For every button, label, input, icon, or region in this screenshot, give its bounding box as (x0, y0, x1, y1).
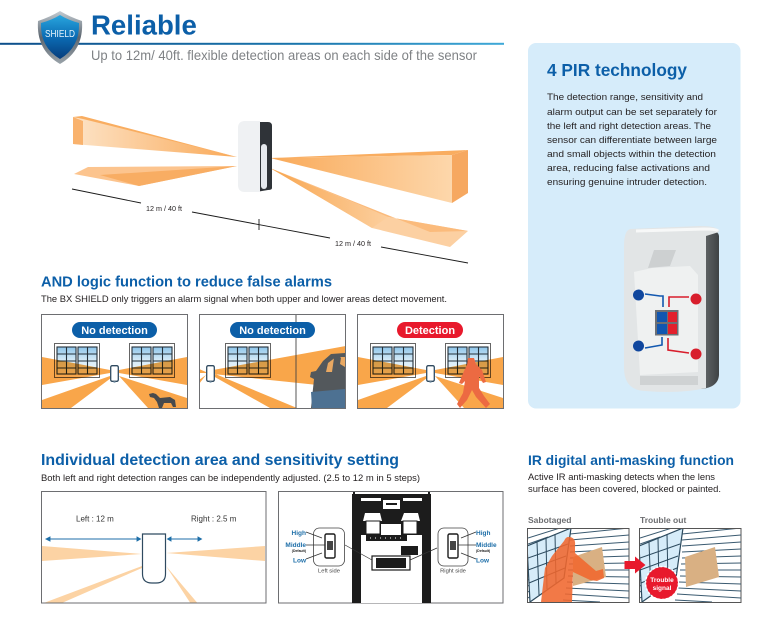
left upper beam (73, 116, 237, 157)
person silhouette (541, 537, 604, 602)
labels: left side: Middle (285, 542, 306, 549)
panel: sabotaged scene (527, 528, 629, 602)
text: AND logic description: The BX SHIELD only triggers an alarm signal when both upper and lower areas detect movement. (41, 294, 447, 304)
icon: car (310, 353, 345, 408)
right lower beam (270, 168, 468, 247)
badge: detection (397, 322, 463, 338)
distance label right: 12 m / 40 ft (335, 239, 371, 248)
title: Reliable (91, 10, 197, 40)
labels: right side: High (476, 530, 490, 537)
left lower beam (74, 166, 237, 186)
badge: no detection: No detection (239, 325, 306, 337)
connector (372, 556, 410, 570)
PIR left, blue (633, 290, 663, 352)
text: PIR description: and small objects within the detection (547, 149, 716, 159)
icon: shield badge (38, 11, 82, 64)
panel: detection with person (358, 314, 504, 408)
label: left range: Left : 12 m (76, 514, 114, 524)
text: IR description: surface has been covered, blocked or painted. (528, 484, 721, 494)
subtitle: Up to 12m/ 40ft. flexible detection areas on each side of the sensor (91, 47, 477, 63)
text: PIR description: area, reducing false activations and (547, 163, 710, 173)
circuit board (345, 492, 437, 603)
text: PIR description: alarm output can be set separately for (547, 107, 717, 117)
text: PIR description: the left and right detection areas. The (547, 121, 711, 131)
panel: no detection with car (199, 314, 346, 408)
badge: detection: Detection (405, 325, 455, 337)
right upper beam (270, 150, 468, 203)
label: trouble out: Trouble out (640, 515, 686, 525)
icon: trouble signal burst (646, 566, 678, 600)
detection area diagram (72, 116, 468, 263)
beams (42, 546, 265, 602)
box (685, 547, 719, 587)
icon: sensor (111, 366, 118, 383)
labels: right side: Right side (440, 568, 466, 574)
panel: trouble out scene (639, 528, 741, 602)
text: IR description (528, 472, 721, 494)
labels: right side: Middle (476, 542, 497, 549)
icon: sensor (207, 366, 214, 383)
icon: trouble signal burst: signal (653, 585, 672, 592)
icon: dog (149, 393, 176, 408)
labels: right side (440, 530, 497, 574)
text: individual detection description: Both left and right detection ranges can be independently adjusted. (2.5 to 12 m in 5 steps) (41, 473, 420, 483)
text: PIR description: The detection range, sensitivity and (547, 92, 703, 102)
distance label left: 12 m / 40 ft (146, 204, 182, 213)
labels: left side (285, 530, 340, 574)
panel: 4 PIR technology (528, 43, 740, 408)
heading: 4 PIR technology: 4 PIR technology (547, 60, 687, 80)
header rule (0, 43, 504, 45)
heading: IR anti-masking: IR digital anti-masking function (528, 452, 734, 468)
labels: left side: Left side (318, 568, 340, 574)
box (573, 547, 606, 586)
icon: sensor (427, 366, 434, 383)
badge: no detection: No detection (81, 325, 148, 337)
sensor unit (238, 121, 272, 192)
text: IR description: Active IR anti-masking detects when the lens (528, 472, 716, 482)
panel: sensitivity switches (278, 492, 503, 603)
heading: individual detection: Individual detection area and sensitivity setting (41, 452, 399, 469)
PIR right, red (668, 294, 702, 360)
badge: no detection (230, 322, 315, 338)
badge: no detection (72, 322, 157, 338)
label: sabotaged: Sabotaged (528, 515, 571, 525)
right inset switch (438, 528, 476, 566)
labels: left side: High (292, 530, 306, 537)
left inset switch (306, 528, 344, 566)
text: PIR description: sensor can differentiate between large (547, 135, 717, 145)
sensor outline (142, 534, 166, 583)
text: PIR description: ensuring genuine intruder detection. (547, 177, 707, 187)
range arrows (46, 537, 202, 541)
icon: person (457, 358, 490, 408)
labels: right side: (Default) (476, 549, 490, 553)
panel: no detection with dog (42, 314, 188, 408)
arrow: sabotaged to trouble out (624, 556, 646, 574)
illustration: sensor with four PIR elements (624, 226, 719, 392)
panel: left and right ranges (42, 492, 266, 603)
label: right range: Right : 2.5 m (191, 514, 237, 524)
labels: left side: (Default) (292, 549, 306, 553)
text: PIR description (547, 92, 717, 187)
labels: left side: Low (293, 558, 307, 564)
labels: right side: Low (476, 558, 490, 564)
icon: shield badge: SHIELD (45, 29, 75, 40)
icon: trouble signal burst: Trouble (650, 577, 674, 584)
pyro element grid (655, 310, 678, 336)
heading: AND logic: AND logic function to reduce false alarms (41, 274, 332, 290)
scale line (72, 189, 468, 263)
